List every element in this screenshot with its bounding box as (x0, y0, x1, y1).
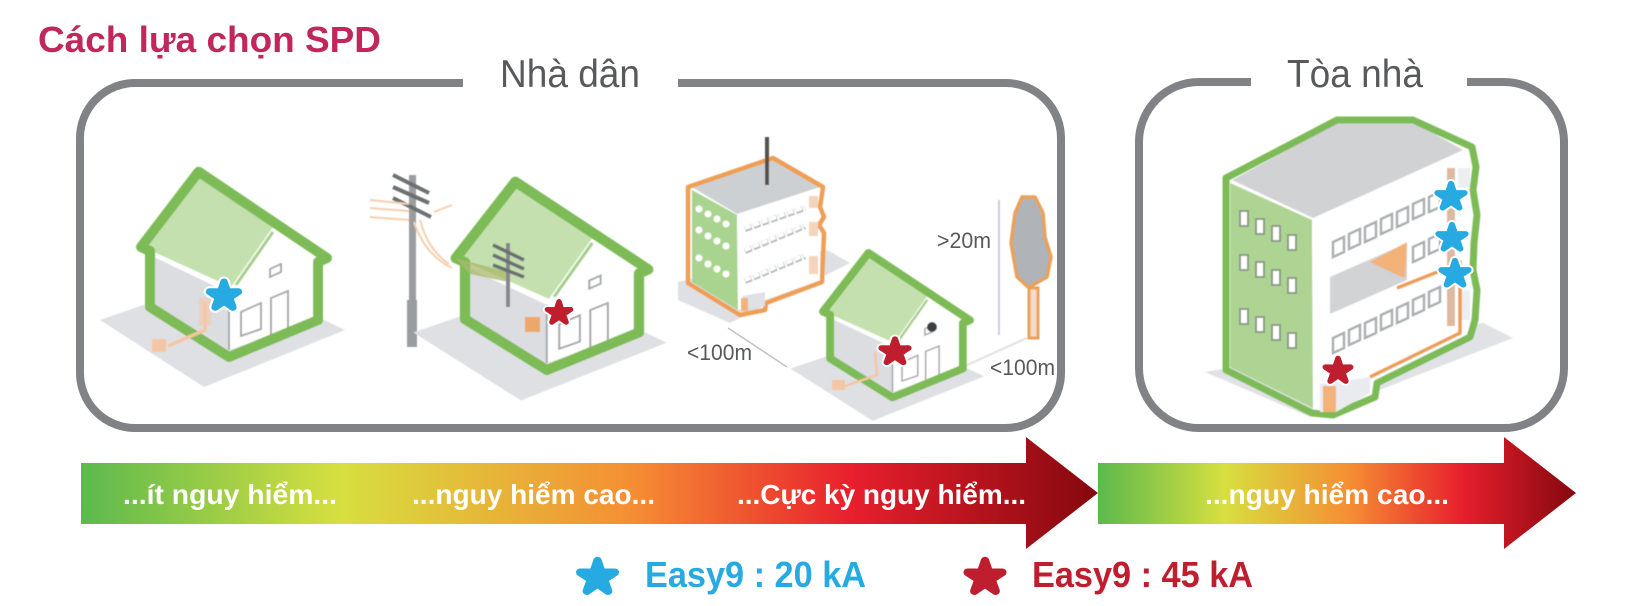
title: Cách lựa chọn SPD (38, 19, 381, 60)
illustration: utility pole with overhead lines (370, 175, 452, 347)
panel heading: Nhà dân: Nhà dân (500, 53, 640, 96)
icon: blue star lower floor (1441, 261, 1469, 285)
left windows (1240, 211, 1296, 348)
arrow shape: buildings (1098, 437, 1576, 549)
panel frame: Tòa nhà (1139, 82, 1564, 428)
risk label: high: ...nguy hiểm cao... (412, 479, 655, 510)
label: distance to tree: <100m (990, 355, 1055, 380)
legend: 20 kA (580, 554, 866, 595)
icon: blue star middle floor (1438, 225, 1466, 249)
arrow: risk scale for houses (81, 437, 1098, 549)
illustration: tall tree (999, 197, 1051, 338)
risk label: low: ...ít nguy hiểm... (123, 479, 337, 510)
label: distance to building: <100m (687, 340, 752, 365)
illustration: neighbouring building with lightning rod (678, 137, 850, 323)
legend text: 45 kA: Easy9 : 45 kA (1032, 554, 1253, 595)
icon: red star house 3 (881, 339, 909, 362)
illustration: house with overhead supply (413, 182, 667, 400)
right windows (1333, 192, 1440, 353)
icon: red star entrance (1325, 358, 1351, 381)
icon: legend red star (968, 561, 1002, 591)
icon: blue star house 1 (210, 282, 238, 307)
icon: red star house 2 (547, 302, 571, 322)
panel heading: Tòa nhà: Tòa nhà (1287, 53, 1423, 96)
risk label: extreme: ...Cực kỳ nguy hiểm... (737, 479, 1026, 510)
arrow shape: houses (81, 437, 1098, 549)
panel: Tòa nhà (1139, 53, 1564, 428)
illustration: distance line between building and house (728, 328, 787, 367)
panel frame: Nhà dân (80, 83, 1061, 428)
arrow: risk scale for buildings (1098, 437, 1576, 549)
legend: 45 kA (968, 554, 1253, 595)
icon: blue star top floor (1437, 184, 1465, 208)
risk label: building high: ...nguy hiểm cao... (1205, 479, 1449, 510)
illustration: small house near tree (791, 253, 1027, 421)
label: tree height: >20m (937, 228, 991, 253)
illustration: house with underground supply (100, 172, 345, 387)
panel: Nhà dân (80, 53, 1061, 428)
legend text: 20 kA: Easy9 : 20 kA (645, 554, 866, 595)
icon: legend blue star (580, 561, 615, 591)
illustration: multi-storey building (1205, 120, 1513, 417)
